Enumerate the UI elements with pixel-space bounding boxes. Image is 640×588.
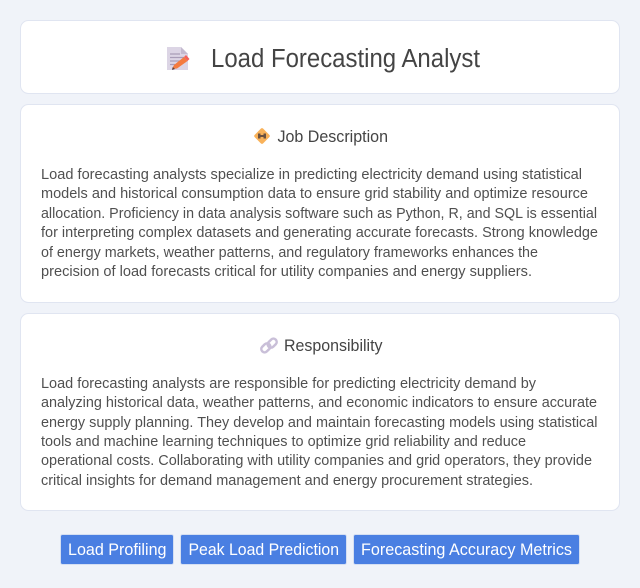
- heading: responsibility: Responsibility: [284, 337, 383, 355]
- text block: responsibility: Load forecasting analysts are responsible for predicting electricity demand by: [41, 375, 536, 392]
- text block: job description: of energy markets, weather patterns, and regulatory frameworks enhances the: [41, 244, 538, 261]
- text block: job description: [41, 166, 598, 280]
- text block: job description: allocation. Proficiency in data analysis software such as Python, R, and SQL is essential: [41, 205, 597, 222]
- tag: peak load prediction: Peak Load Prediction: [188, 541, 339, 559]
- tag: load profiling: Load Profiling: [68, 541, 166, 559]
- tag: load profiling: [60, 534, 174, 564]
- text block: job description: models and historical consumption data to ensure grid stability and optimize resource: [41, 185, 588, 202]
- tag: forecasting accuracy metrics: [354, 534, 580, 564]
- text block: responsibility: analyzing historical data, weather patterns, and economic indicators to ensure accurate: [41, 394, 597, 411]
- text block: responsibility: tools and machine learning techniques to optimize grid reliability and reduce: [41, 433, 526, 450]
- text block: job description: precision of load forecasts critical for utility companies and energy suppliers.: [41, 263, 532, 280]
- icon: chain link: [260, 337, 278, 354]
- text block: responsibility: operational costs. Collaborating with utility companies and grid operators, they provide: [41, 452, 592, 469]
- text block: job description: Load forecasting analysts specialize in predicting electricity demand using statistical: [41, 166, 582, 183]
- text block: responsibility: energy supply planning. They develop and maintain forecasting models using statistical: [41, 414, 598, 431]
- text block: responsibility: critical insights for demand management and energy procurement strategies.: [41, 472, 533, 489]
- icon: puzzle diamond: [254, 128, 270, 144]
- icon: document with pencil: [167, 47, 190, 70]
- heading: job description: Job Description: [278, 128, 388, 146]
- text block: job description: for interpreting complex datasets and generating accurate forecasts. Strong knowledge: [41, 224, 598, 241]
- title: Load Forecasting Analyst: [211, 45, 480, 73]
- text block: responsibility: [41, 375, 598, 489]
- tag: peak load prediction: [180, 534, 346, 564]
- panel: title card: [20, 20, 620, 94]
- panel: responsibility: [20, 314, 620, 510]
- panel: job description: [20, 104, 620, 302]
- tag: forecasting accuracy metrics: Forecasting Accuracy Metrics: [361, 541, 572, 559]
